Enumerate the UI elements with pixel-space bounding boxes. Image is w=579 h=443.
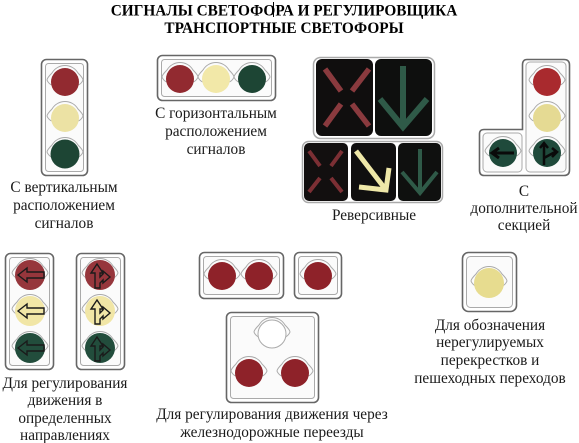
title: ТРАНСПОРТНЫЕ СВЕТОФОРЫ xyxy=(164,20,404,37)
label: additional section xyxy=(470,183,578,234)
panel: railway signal, three lamps xyxy=(226,312,318,402)
panel: railway signal, one lamp xyxy=(294,252,342,298)
label: horizontal xyxy=(155,105,277,158)
label: vertical xyxy=(10,179,118,232)
label: horizontal: сигналов xyxy=(187,141,245,158)
label: railway: железнодорожные переезды xyxy=(179,424,364,441)
panel: directional signal, left arrow xyxy=(6,254,54,370)
label: flashing yellow: нерегулируемых xyxy=(436,334,544,351)
label: additional section: секцией xyxy=(498,217,550,234)
label: horizontal: расположением xyxy=(165,123,267,140)
label: vertical: С вертикальным xyxy=(10,179,118,196)
label: reversible: Реверсивные xyxy=(332,207,416,224)
panel: signal with additional section xyxy=(480,60,570,176)
panel: reversible signal, two sections xyxy=(314,58,434,138)
label: flashing yellow: пешеходных переходов xyxy=(414,370,566,387)
label: directional: Для регулирования xyxy=(3,375,127,392)
label: additional section: С xyxy=(519,183,529,200)
label: directional: определенных xyxy=(18,410,112,427)
label: flashing yellow: Для обозначения xyxy=(435,317,545,334)
label: vertical: сигналов xyxy=(35,215,93,232)
label: railway xyxy=(156,406,388,441)
label: vertical: расположением xyxy=(13,197,115,214)
label: horizontal: С горизонтальным xyxy=(155,105,277,122)
label: flashing yellow: перекрестков и xyxy=(441,352,539,369)
title: СИГНАЛЫ СВЕТОФОРА И РЕГУЛИРОВЩИКА xyxy=(111,2,457,20)
label: directional xyxy=(3,375,127,443)
panel: directional signal, straight and right arrow xyxy=(76,254,124,370)
title xyxy=(111,2,457,37)
panel: railway signal, two lamps xyxy=(200,252,284,298)
label: directional: движения в xyxy=(28,392,102,409)
panel: horizontal traffic light xyxy=(158,56,276,100)
label: flashing yellow xyxy=(414,317,566,387)
panel: vertical traffic light xyxy=(42,60,88,176)
panel: reversible signal, three sections xyxy=(302,142,442,202)
label: additional section: дополнительной xyxy=(470,200,578,217)
label: railway: Для регулирования движения через xyxy=(156,406,388,423)
panel: flashing yellow signal xyxy=(462,252,516,312)
